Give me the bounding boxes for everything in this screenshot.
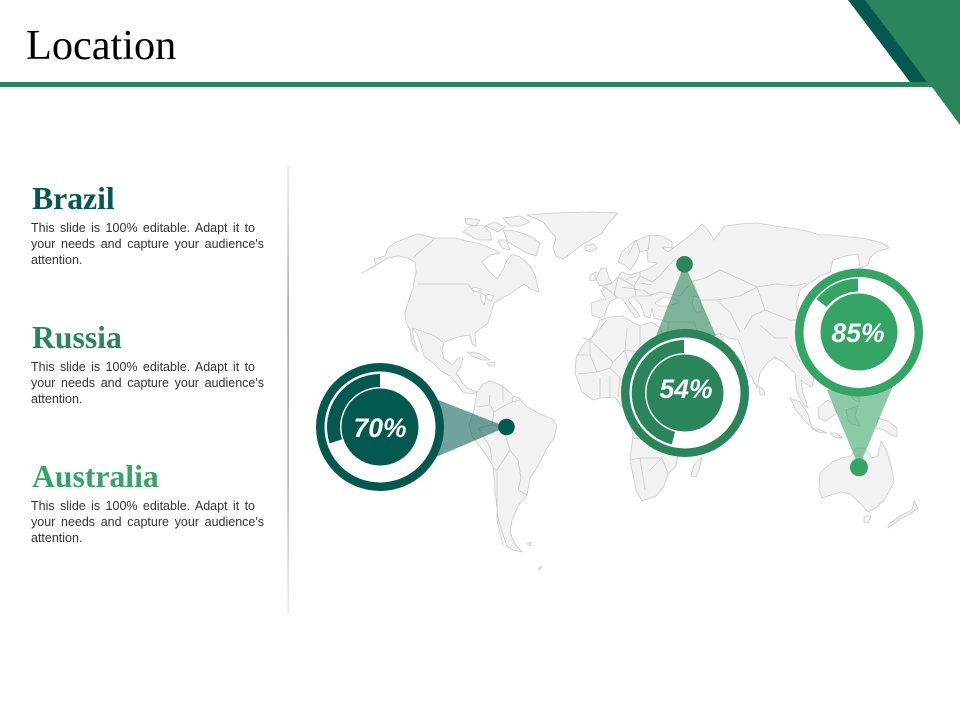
text block: Russia: attention. [31,392,82,406]
header rule [0,82,932,87]
text block: Russia: your needs and capture your audience's [31,376,264,390]
Arctic islands [463,225,492,240]
pointer: Brazil [436,399,506,457]
donut: 85%: 85% [831,318,885,348]
text block: Australia [31,459,264,545]
text block: Russia: This slide is 100% editable. Adapt it to [31,360,255,374]
Falkland and small islands [527,542,531,546]
Eurasia borders [606,235,807,362]
pin: Australia [850,458,868,476]
Sulawesi [846,406,860,426]
Africa borders [576,320,668,490]
North America borders [412,238,474,365]
Philippines [850,385,860,402]
Australia [819,441,894,512]
Africa [575,316,712,501]
Borneo [818,400,837,421]
donut: 54% [621,329,749,457]
donut: 54%: 54% [659,374,713,404]
Iceland [585,244,597,252]
pointer: Australia [827,386,893,467]
pointer: Russia [656,264,716,336]
text block: Brazil: your needs and capture your audience's [31,237,264,251]
donut: 70% [316,363,444,491]
Greenland [527,212,618,259]
Great Lakes [472,287,494,305]
text block: Brazil: This slide is 100% editable. Adapt it to [31,221,255,235]
corner accent: green triangle [865,0,960,125]
vertical divider [288,166,289,614]
text block: Brazil [31,181,264,267]
text block: Australia: your needs and capture your audience's [31,515,264,529]
Java and lesser islands [812,428,827,433]
pin: Russia [676,256,693,273]
Sumatra [790,398,812,428]
donut: 85% [795,268,923,396]
text block: Russia: Russia [32,320,122,355]
Cuba and Caribbean [467,352,490,360]
corner accent: dark stripe [848,0,928,82]
Eurasia [591,223,889,408]
text block: Australia: attention. [31,531,82,545]
Ireland [590,272,596,281]
Sri Lanka [759,386,765,395]
title: Location [26,22,176,69]
Great Britain [596,268,612,286]
South America borders [478,385,527,545]
Black Sea and Caspian Sea [655,296,702,312]
pin: Brazil [498,419,515,435]
New Zealand [888,501,918,528]
world map [362,212,918,570]
text block: Brazil: Brazil [32,181,115,216]
Madagascar [691,457,702,477]
Tasmania [864,516,871,523]
text block: Russia [31,320,264,406]
text block: Brazil: attention. [31,253,82,267]
text block: Australia: This slide is 100% editable. Adapt it to [31,499,255,513]
South America [469,381,557,552]
text block: Australia: Australia [32,459,159,494]
donut: 70%: 70% [353,413,407,443]
New Guinea [876,418,897,437]
North America [362,234,539,394]
